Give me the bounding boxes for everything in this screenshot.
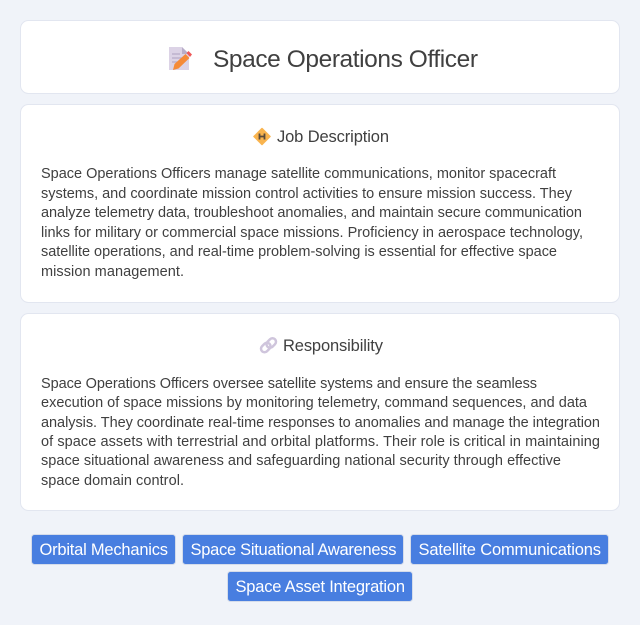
text block: job description: satellite operations, and real-time problem-solving is essential for effective space — [41, 244, 557, 260]
tag: Satellite Communications: Satellite Communications — [418, 541, 601, 559]
text block: responsibility: analysis. They coordinate real-time responses to anomalies and manage the integration — [41, 415, 600, 431]
text block: job description: analyze telemetry data, troubleshoot anomalies, and maintain secure communication — [41, 205, 582, 221]
icon: chain link — [260, 337, 277, 354]
tag: Space Asset Integration: Space Asset Integration — [236, 578, 405, 596]
icon: road sign diamond — [254, 128, 270, 144]
text block: responsibility — [41, 376, 600, 489]
tag: Space Situational Awareness — [182, 534, 404, 564]
tag: Space Situational Awareness: Space Situational Awareness — [190, 541, 396, 559]
text block: job description: links for military or commercial space missions. Proficiency in aerospace technology, — [41, 225, 583, 241]
panel: responsibility — [20, 314, 620, 510]
text block: job description — [41, 166, 583, 280]
heading: job description: Job Description — [277, 128, 389, 146]
text block: job description: Space Operations Officers manage satellite communications, monitor spacecraft — [41, 166, 556, 182]
text block: responsibility: space domain control. — [41, 473, 184, 489]
text block: job description: systems, and coordinate mission control activities to ensure mission success. They — [41, 186, 573, 202]
tag: Satellite Communications — [410, 534, 608, 564]
text block: responsibility: Space Operations Officers oversee satellite systems and ensure the seamless — [41, 376, 537, 392]
tag: Orbital Mechanics: Orbital Mechanics — [40, 541, 168, 559]
text block: responsibility: execution of space missions by monitoring telemetry, command sequences, and data — [41, 395, 588, 411]
heading: responsibility: Responsibility — [283, 337, 384, 355]
text block: responsibility: of space assets with terrestrial and orbital platforms. Their role is critical in maintaining — [41, 434, 600, 450]
text block: responsibility: space situational awareness and safeguarding national security through effective — [41, 453, 561, 469]
text block: job description: mission management. — [41, 264, 184, 280]
tag: Orbital Mechanics — [32, 534, 176, 564]
panel: job description — [20, 104, 620, 302]
icon: document with pencil — [169, 47, 192, 70]
title: Space Operations Officer — [213, 46, 478, 73]
panel: title card — [20, 20, 620, 94]
tag: Space Asset Integration — [228, 572, 412, 602]
